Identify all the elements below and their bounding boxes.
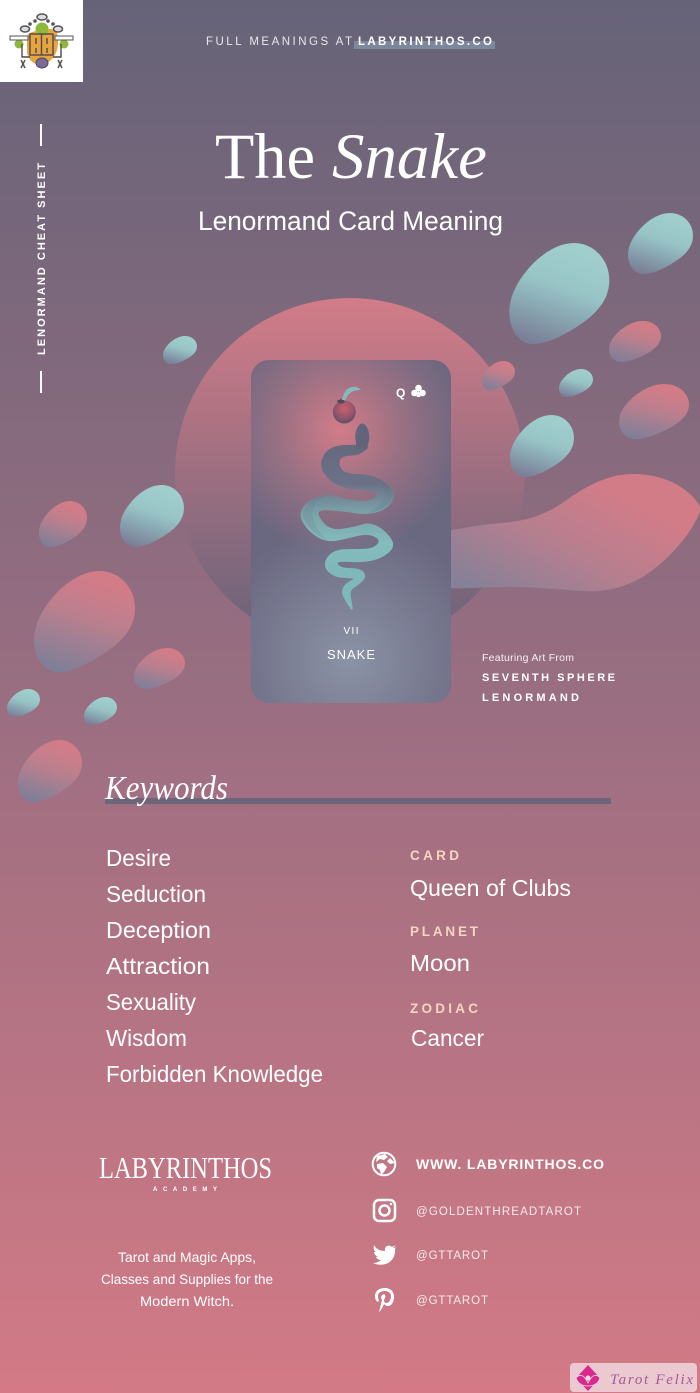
- twitter handle: @GTTAROT: [416, 1250, 488, 1262]
- keywords heading: [104, 770, 611, 807]
- footer logo: ACADEMY: [153, 1187, 217, 1193]
- card attribute: CARD: [410, 848, 459, 863]
- planet attribute: [410, 924, 479, 976]
- keywords list: Deception: [106, 917, 211, 943]
- sidebar label: LENORMAND CHEAT SHEET: [36, 163, 48, 355]
- snake head: [355, 423, 369, 449]
- card suit: queen of clubs: [396, 385, 426, 400]
- subtitle: Lenormand Card Meaning: [198, 206, 503, 236]
- art credit: LENORMAND: [482, 692, 579, 704]
- watermark: Tarot Felix: [570, 1363, 697, 1392]
- footer logo: [99, 1150, 272, 1193]
- snake folds: [303, 478, 393, 541]
- header link: [206, 36, 495, 49]
- pinterest handle: @GTTAROT: [416, 1295, 488, 1307]
- card: [251, 360, 451, 703]
- footer tagline: [101, 1249, 273, 1309]
- website link: WWW. LABYRINTHOS.CO: [416, 1156, 604, 1172]
- footer logo: LABYRINTHOS: [99, 1150, 272, 1185]
- icon: pinterest: [375, 1288, 394, 1312]
- keywords list: Forbidden Knowledge: [106, 1061, 323, 1087]
- icon: globe: [373, 1153, 395, 1175]
- zodiac attribute: [410, 1001, 484, 1051]
- footer tagline: Classes and Supplies for the: [101, 1271, 273, 1287]
- watermark: Tarot Felix: Tarot Felix: [610, 1372, 693, 1388]
- icon: apple: [333, 387, 361, 424]
- icon: instagram: [374, 1200, 395, 1221]
- snake body: [302, 446, 393, 608]
- instagram handle: @GOLDENTHREADTAROT: [416, 1206, 581, 1218]
- footer tagline: Modern Witch.: [140, 1293, 234, 1309]
- keywords list: Seduction: [106, 881, 206, 907]
- art credit: SEVENTH SPHERE: [482, 672, 615, 684]
- title: [215, 121, 487, 193]
- art credit: Featuring Art From: [482, 652, 574, 664]
- art credit: [482, 652, 615, 704]
- icon: twitter: [373, 1245, 396, 1265]
- card attribute: [410, 848, 571, 901]
- footer tagline: Tarot and Magic Apps,: [118, 1249, 256, 1265]
- logo: Labyrinthos badge: [0, 0, 83, 82]
- icon: snake: [302, 423, 393, 608]
- keywords list: Wisdom: [106, 1025, 187, 1051]
- title: The: [215, 121, 315, 193]
- planet attribute: PLANET: [410, 924, 479, 939]
- card suit: queen of clubs: Q: [396, 386, 405, 400]
- card name: SNAKE: [327, 647, 375, 662]
- keywords heading: Keywords: [104, 770, 228, 807]
- planet attribute: Moon: [410, 950, 470, 976]
- card number: VII: [344, 626, 358, 637]
- keywords list: Desire: [106, 845, 171, 871]
- header link: LABYRINTHOS.CO: [358, 36, 492, 48]
- keywords list: Sexuality: [106, 989, 196, 1015]
- zodiac attribute: Cancer: [411, 1025, 484, 1051]
- decorative blobs: [7, 213, 693, 802]
- header link: FULL MEANINGS AT: [206, 36, 352, 48]
- title: Snake: [332, 121, 487, 193]
- wave shape: [420, 474, 700, 591]
- large circle: [175, 298, 525, 648]
- keywords list: [106, 845, 323, 1087]
- zodiac attribute: ZODIAC: [410, 1001, 478, 1016]
- keywords list: Attraction: [106, 953, 210, 979]
- card attribute: Queen of Clubs: [410, 875, 571, 901]
